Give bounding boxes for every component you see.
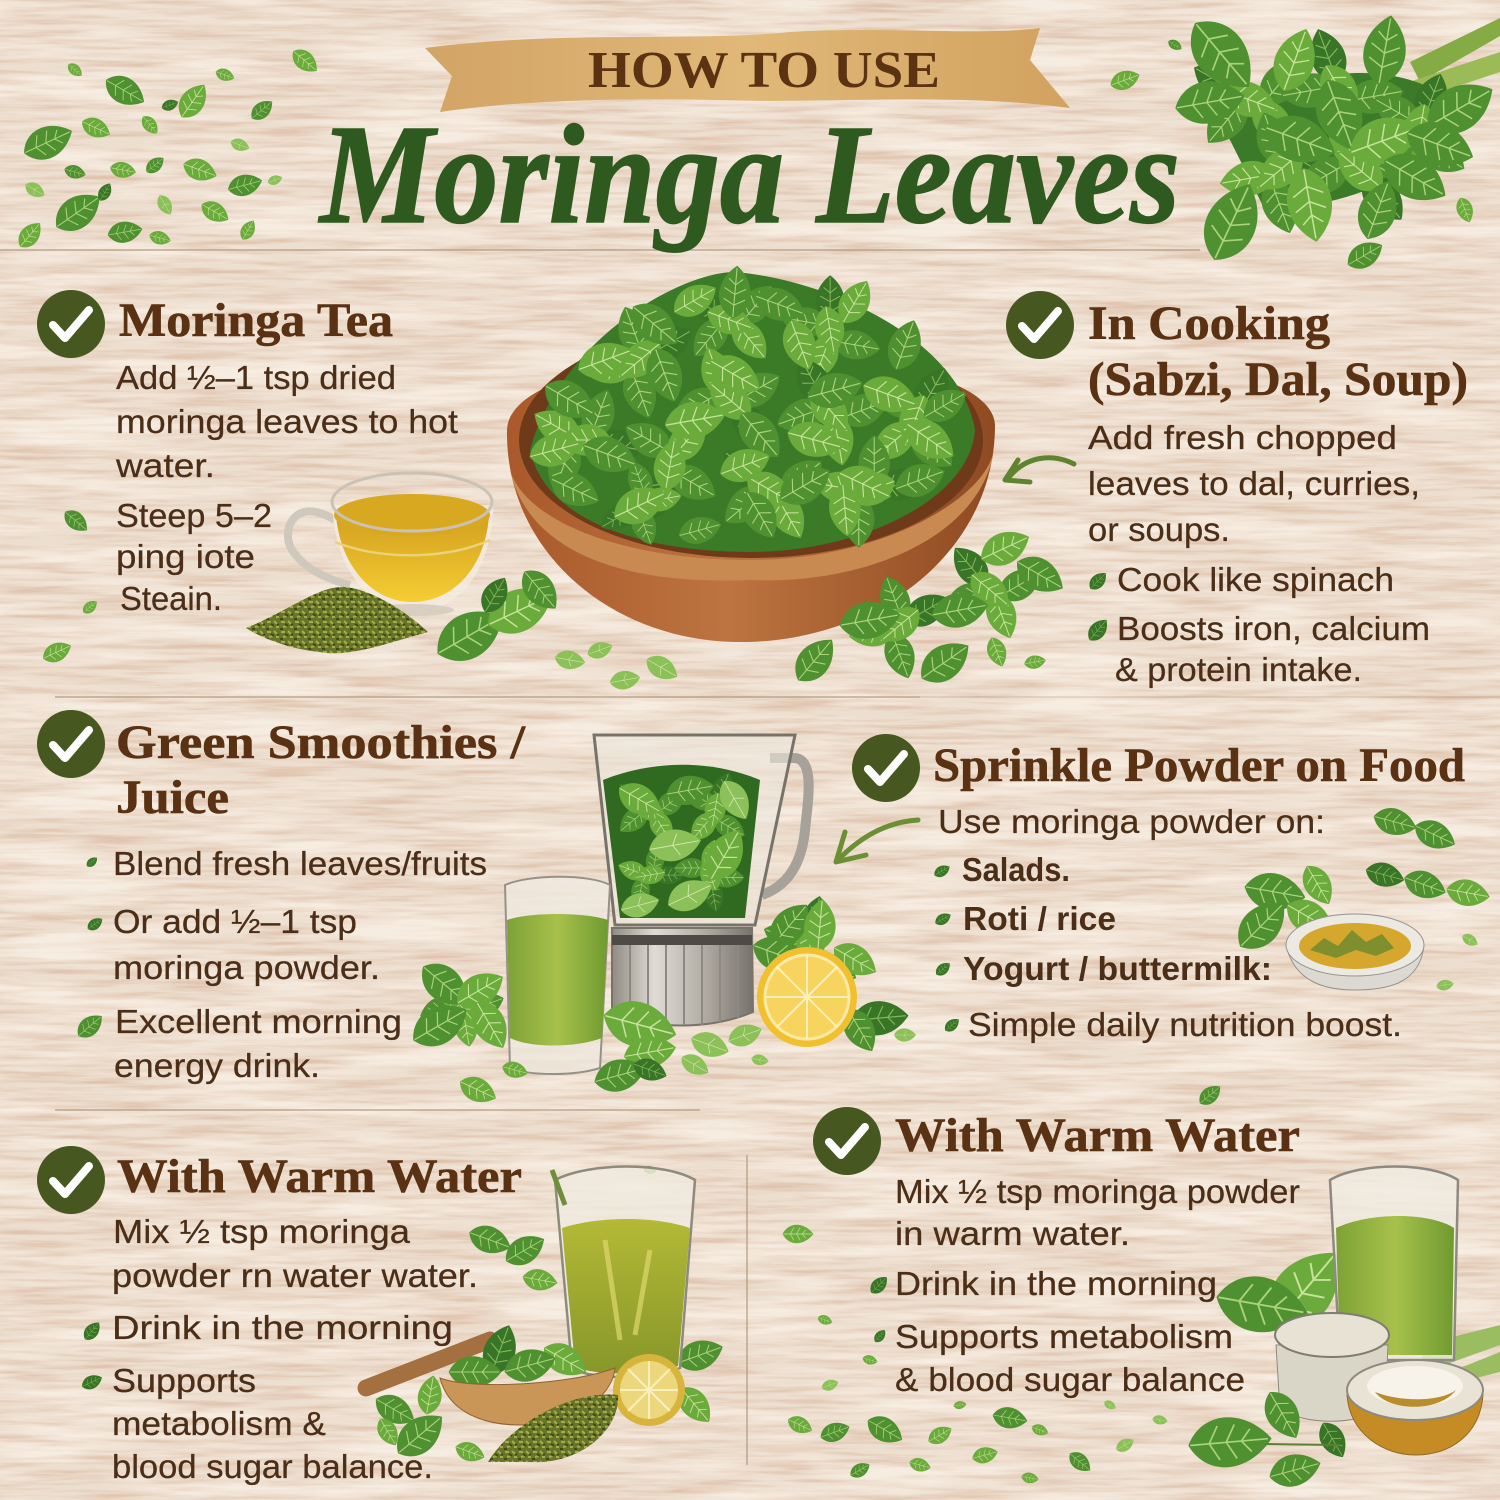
powder on leaf bbox=[488, 1395, 618, 1462]
text: warm water directions: blood sugar balance. bbox=[112, 1448, 433, 1485]
text: sprinkle list: Simple daily nutrition boost. bbox=[968, 1006, 1402, 1043]
check icon bbox=[37, 1146, 105, 1214]
text: warm water directions: in warm water. bbox=[895, 1215, 1130, 1252]
text: tea directions: water. bbox=[115, 447, 215, 484]
scattered leaves: top left bbox=[13, 44, 323, 253]
powder jar bbox=[1275, 1313, 1389, 1421]
text: cooking directions: Add fresh chopped bbox=[1088, 419, 1397, 456]
pestle bbox=[366, 1340, 490, 1388]
lemon bbox=[757, 947, 857, 1047]
text: warm water directions: Supports bbox=[112, 1362, 256, 1399]
text: tea directions: Steain. bbox=[120, 580, 222, 617]
heading: sprinkle powder on food: Sprinkle Powder on Food bbox=[933, 739, 1465, 792]
mortar with leaves bbox=[440, 1320, 615, 1425]
heading: in cooking: (Sabzi, Dal, Soup) bbox=[1088, 353, 1468, 406]
text: warm water directions: & blood sugar balance bbox=[895, 1361, 1245, 1398]
heading: with warm water: With Warm Water bbox=[895, 1109, 1300, 1162]
small leaves bbox=[39, 505, 100, 667]
illustration: bowl with leaves bbox=[1227, 804, 1492, 992]
section: with warm water left bbox=[37, 1146, 522, 1485]
section: moringa tea bbox=[37, 290, 493, 667]
section: in cooking bbox=[1006, 291, 1468, 688]
check icon bbox=[37, 710, 105, 778]
leaves at base bbox=[1186, 1384, 1353, 1492]
text: tea directions: moringa leaves to hot bbox=[116, 403, 458, 440]
section: with warm water right bbox=[813, 1107, 1300, 1398]
text: smoothie directions: Excellent morning bbox=[115, 1003, 402, 1040]
illustration: glass jar and honey bowl bbox=[1186, 1166, 1500, 1492]
text: cooking directions: & protein intake. bbox=[1115, 651, 1362, 688]
heading: green smoothies bbox=[116, 716, 526, 824]
text: warm water directions: Supports metabolism bbox=[895, 1318, 1233, 1355]
heading: in cooking: In Cooking bbox=[1088, 297, 1330, 350]
heading: with warm water: With Warm Water bbox=[117, 1150, 522, 1203]
illustration: dried tea pile bbox=[246, 587, 428, 653]
text: cooking directions bbox=[1083, 419, 1430, 688]
text: cooking directions: Boosts iron, calcium bbox=[1117, 610, 1430, 647]
large leaves bbox=[1212, 1234, 1358, 1346]
text: tea directions: ping iote bbox=[116, 538, 255, 575]
text: sprinkle list: Roti / rice bbox=[963, 900, 1116, 937]
heading: green smoothies: Green Smoothies / bbox=[116, 716, 526, 769]
moringa stalks bbox=[1420, 1325, 1500, 1382]
text: smoothie directions bbox=[72, 845, 487, 1084]
scattered leaves under bowl bbox=[426, 562, 682, 692]
text: smoothie directions: Blend fresh leaves/fruits bbox=[113, 845, 487, 882]
text: cooking directions: leaves to dal, curries, bbox=[1088, 465, 1420, 502]
text: smoothie directions: energy drink. bbox=[114, 1047, 320, 1084]
leaf mound bbox=[513, 261, 975, 563]
arrow: to blender bbox=[836, 820, 918, 862]
scattered leaves right of bowl bbox=[786, 523, 1071, 693]
text: warm water directions bbox=[79, 1213, 478, 1485]
scattered leaves: bottom right bbox=[783, 1080, 1225, 1485]
green leaves bbox=[369, 1373, 488, 1466]
text: smoothie directions: Or add ½–1 tsp bbox=[113, 903, 357, 940]
text: sprinkle list: Use moringa powder on: bbox=[938, 803, 1325, 840]
check icon bbox=[852, 734, 920, 802]
banner heading: HOW TO USE bbox=[588, 42, 940, 99]
text: tea directions bbox=[115, 359, 458, 617]
blender leaves bbox=[605, 765, 759, 922]
text: cooking directions: or soups. bbox=[1088, 511, 1230, 548]
glass of green juice bbox=[505, 877, 610, 1074]
text: cooking directions: Cook like spinach bbox=[1117, 561, 1394, 598]
check icon bbox=[37, 290, 105, 358]
lemon slice bbox=[613, 1354, 685, 1426]
illustration: glass with mortar and lemon bbox=[366, 1165, 728, 1466]
blender base bbox=[612, 928, 753, 1026]
illustration: top right leaf bunch bbox=[1107, 7, 1500, 275]
arrow: to cooking bbox=[1005, 458, 1074, 482]
heading: in cooking bbox=[1088, 297, 1468, 406]
text: tea directions: Steep 5–2 bbox=[116, 497, 272, 534]
honey bowl bbox=[1347, 1360, 1483, 1455]
leaves behind bbox=[402, 884, 910, 1060]
section: green smoothies bbox=[37, 710, 526, 1084]
section: sprinkle powder bbox=[852, 734, 1492, 1043]
text: smoothie directions: moringa powder. bbox=[113, 949, 380, 986]
text: sprinkle list: Yogurt / buttermilk: bbox=[963, 950, 1272, 987]
blender jar bbox=[594, 735, 795, 925]
check icon bbox=[1006, 291, 1074, 359]
heading: moringa tea: Moringa Tea bbox=[119, 294, 393, 347]
text: warm water directions: Mix ½ tsp moringa powder bbox=[895, 1173, 1300, 1210]
illustration: blender with juice and lemon bbox=[402, 735, 916, 1109]
leaves behind bbox=[465, 1165, 728, 1430]
text: warm water directions bbox=[867, 1173, 1300, 1398]
text: sprinkle list bbox=[932, 803, 1402, 1043]
illustration: wooden bowl of moringa leaves bbox=[426, 261, 1071, 693]
text: warm water directions: Drink in the morning bbox=[895, 1265, 1217, 1302]
tall glass bbox=[1330, 1166, 1458, 1360]
text: tea directions: Add ½–1 tsp dried bbox=[116, 359, 396, 396]
heading: green smoothies: Juice bbox=[116, 771, 229, 824]
glass of warm moringa water bbox=[552, 1166, 695, 1377]
illustration: cup of tea bbox=[288, 473, 493, 616]
text: warm water directions: Drink in the morning bbox=[112, 1309, 453, 1346]
text: warm water directions: powder rn water water. bbox=[112, 1257, 478, 1294]
title: Moringa Leaves bbox=[318, 95, 1180, 253]
text: sprinkle list: Salads. bbox=[962, 851, 1070, 888]
banner: how to use bbox=[425, 28, 1070, 112]
blender handle bbox=[762, 758, 809, 895]
check icon bbox=[813, 1107, 881, 1175]
text: warm water directions: metabolism & bbox=[112, 1405, 326, 1442]
leaf scraps bbox=[455, 994, 916, 1109]
text: warm water directions: Mix ½ tsp moringa bbox=[113, 1213, 411, 1250]
